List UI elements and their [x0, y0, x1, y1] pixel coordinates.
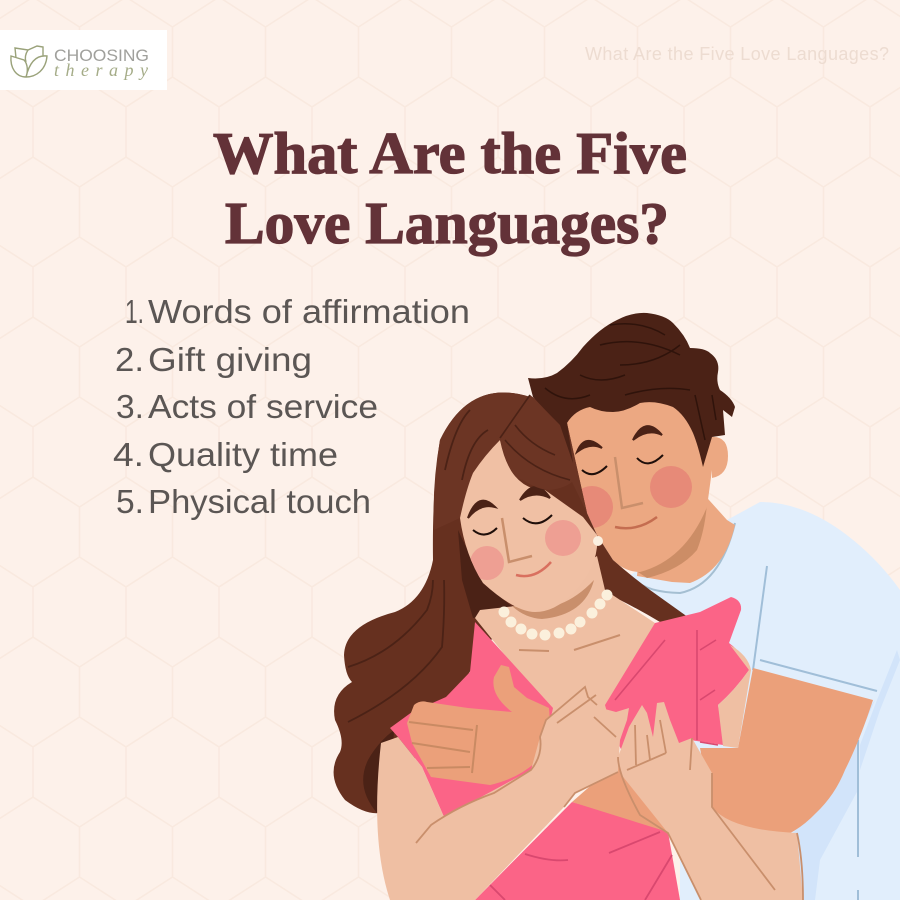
man's forearm behind hands [572, 760, 712, 835]
list: five love languages: Physical touch [148, 483, 371, 520]
man's shirt [630, 502, 900, 900]
woman's bang strands [500, 395, 570, 480]
list: five love languages: Words of affirmation [148, 293, 470, 330]
list: five love languages [113, 293, 470, 520]
list: five love languages: 5. [116, 483, 144, 520]
woman's upper hair [434, 393, 530, 530]
man's neck shadow [638, 503, 707, 578]
woman's hair strands [348, 410, 488, 722]
man's arm [700, 668, 873, 842]
woman's shoulder [718, 645, 751, 748]
woman's collar lines [519, 635, 620, 651]
list: five love languages: 1. [125, 293, 144, 330]
icon: lotus logo [11, 46, 47, 77]
woman's head [460, 440, 597, 612]
woman's bangs [500, 395, 587, 513]
woman's neck and chest [475, 556, 655, 725]
title [213, 120, 687, 256]
man's head [567, 402, 728, 572]
man's hand [407, 665, 550, 785]
logo badge [0, 30, 167, 90]
dress lower [475, 802, 680, 900]
dress lower folds [490, 832, 672, 900]
header label: What Are the Five Love Languages? [585, 44, 889, 64]
man's neck [637, 490, 735, 583]
list: five love languages: Gift giving [148, 341, 312, 378]
woman's long hair [334, 393, 720, 813]
title: What Are the Five [213, 120, 687, 186]
dress upper right [605, 597, 749, 790]
dress upper left [390, 622, 553, 817]
list: five love languages: 3. [116, 388, 144, 425]
woman's hair shadow [363, 530, 516, 813]
man's hair [528, 313, 735, 467]
logo script: therapy [54, 60, 148, 80]
title: Love Languages? [225, 190, 669, 256]
list: five love languages: 4. [113, 436, 144, 473]
man's finger lines [409, 722, 477, 773]
woman's right hand and arm [618, 702, 803, 900]
list: five love languages: Acts of service [148, 388, 378, 425]
list: five love languages: Quality time [148, 436, 338, 473]
woman's neck shadow [512, 580, 594, 619]
dress folds [615, 630, 718, 745]
pearl necklace [498, 590, 612, 640]
illustration: embracing couple [334, 313, 900, 900]
list: five love languages: 2. [115, 341, 144, 378]
woman's left arm and fist [377, 687, 629, 900]
logo wordmark: CHOOSING [54, 46, 149, 65]
earring [593, 536, 603, 546]
